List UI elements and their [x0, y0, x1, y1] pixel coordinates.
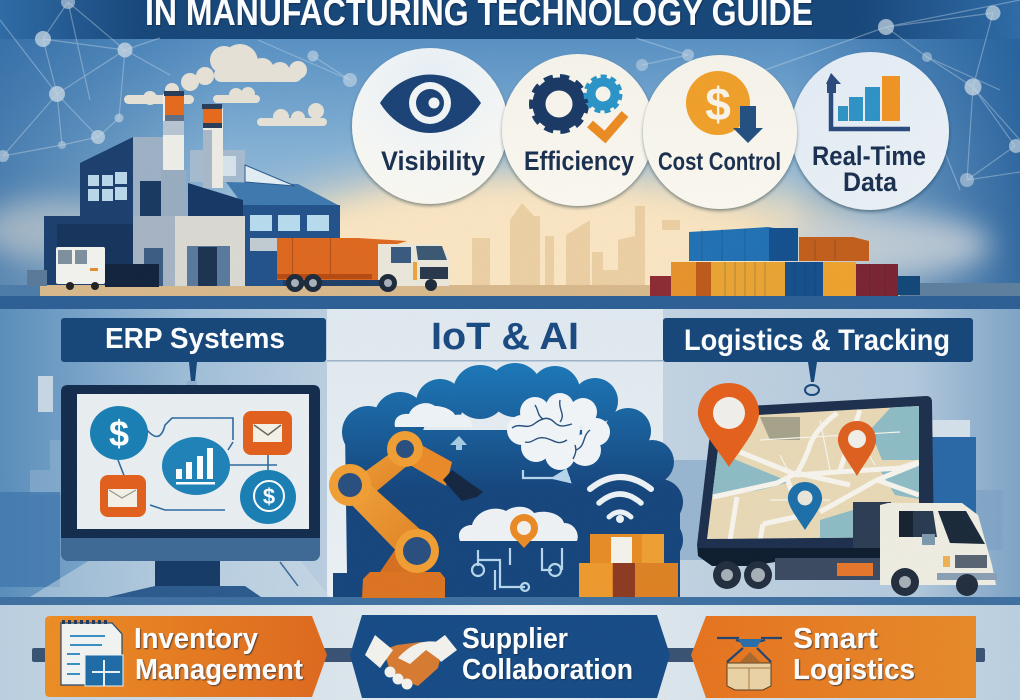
banner: smart logistics [691, 616, 976, 698]
background: sky [0, 39, 1020, 285]
icon: dollar seal [240, 470, 296, 524]
blue pin [788, 482, 822, 530]
banner: supplier collaboration: Collaboration [462, 654, 633, 686]
boxes [579, 534, 678, 597]
real-time data circle [791, 52, 949, 210]
circuit [472, 470, 570, 591]
ERP systems section [61, 318, 326, 597]
small orange pin [838, 421, 876, 476]
icon: orange pin [510, 514, 538, 548]
label: smart logistics: Smart [793, 623, 878, 655]
network lines and nodes right [636, 0, 1020, 190]
icon: mail bottom [100, 475, 146, 517]
logistics and tracking section [663, 318, 997, 596]
banner: supplier collaboration [350, 615, 670, 698]
blue rear building and roof [243, 205, 340, 286]
small cloud top [395, 403, 472, 427]
chimney left [161, 91, 186, 216]
visibility circle [352, 48, 508, 204]
icon: mail top [243, 411, 292, 455]
label: cost control: Cost Control [658, 148, 781, 176]
icon: bar chart [826, 73, 910, 129]
shipping containers [650, 227, 920, 296]
connector bar [32, 648, 985, 662]
title banner [0, 0, 1020, 39]
white van [56, 247, 105, 290]
cloud background [333, 363, 683, 597]
label: efficiency: Efficiency [524, 146, 634, 176]
left dark block [44, 137, 133, 285]
brain [507, 393, 610, 470]
lower section background [0, 309, 1020, 700]
icon: dollar circle: $ [109, 413, 129, 454]
label: visibility: Visibility [381, 146, 485, 176]
label: real-time data: Real-Time [812, 141, 926, 171]
orange truck [277, 238, 449, 292]
banner: smart logistics: Logistics [793, 654, 915, 686]
white cloud with pin [459, 507, 578, 548]
header: IoT & AI: IoT & AI [431, 316, 579, 358]
map tablet [697, 396, 934, 556]
icon: chart circle [162, 437, 230, 495]
real-time data circle: Data [843, 167, 898, 197]
monitor [61, 385, 320, 597]
large orange pin [698, 383, 759, 467]
smoke clouds [124, 44, 327, 126]
chimney right [202, 104, 223, 188]
icon: drone with package [717, 638, 782, 690]
background blue building [930, 437, 976, 547]
robot arm [329, 431, 483, 598]
label: supplier collaboration: Supplier [462, 623, 568, 655]
wifi [590, 477, 651, 522]
header: logistics & tracking [663, 318, 973, 395]
network lines and nodes left [0, 0, 357, 162]
white front block [133, 216, 245, 286]
icon: handshake [365, 635, 457, 690]
cost control circle [643, 55, 797, 209]
header: ERP systems [61, 318, 326, 385]
icon: clipboard [61, 622, 123, 686]
arrow up [450, 436, 467, 450]
header: logistics & tracking: Logistics & Tracking [684, 324, 950, 357]
skyline [472, 203, 680, 296]
ground line [0, 283, 1020, 309]
label: inventory management: Inventory [134, 623, 258, 655]
efficiency circle [502, 54, 654, 206]
banner: inventory management [45, 616, 327, 697]
icon: gears and check [532, 76, 625, 137]
grey mid block [133, 137, 165, 216]
delivery truck [698, 502, 997, 596]
icon: dollar coin with down arrow: $ [705, 78, 731, 130]
icon: dollar circle [90, 406, 148, 460]
icon: dollar seal: $ [263, 484, 275, 509]
dark trailer [105, 264, 159, 287]
icon: dollar coin with down arrow [686, 71, 763, 143]
icon: eye [380, 74, 481, 133]
banner: inventory management: Management [135, 654, 303, 686]
screen network icons [90, 406, 296, 524]
factory [27, 91, 340, 290]
header: ERP systems: ERP Systems [105, 323, 285, 355]
IoT and AI section [329, 316, 683, 598]
